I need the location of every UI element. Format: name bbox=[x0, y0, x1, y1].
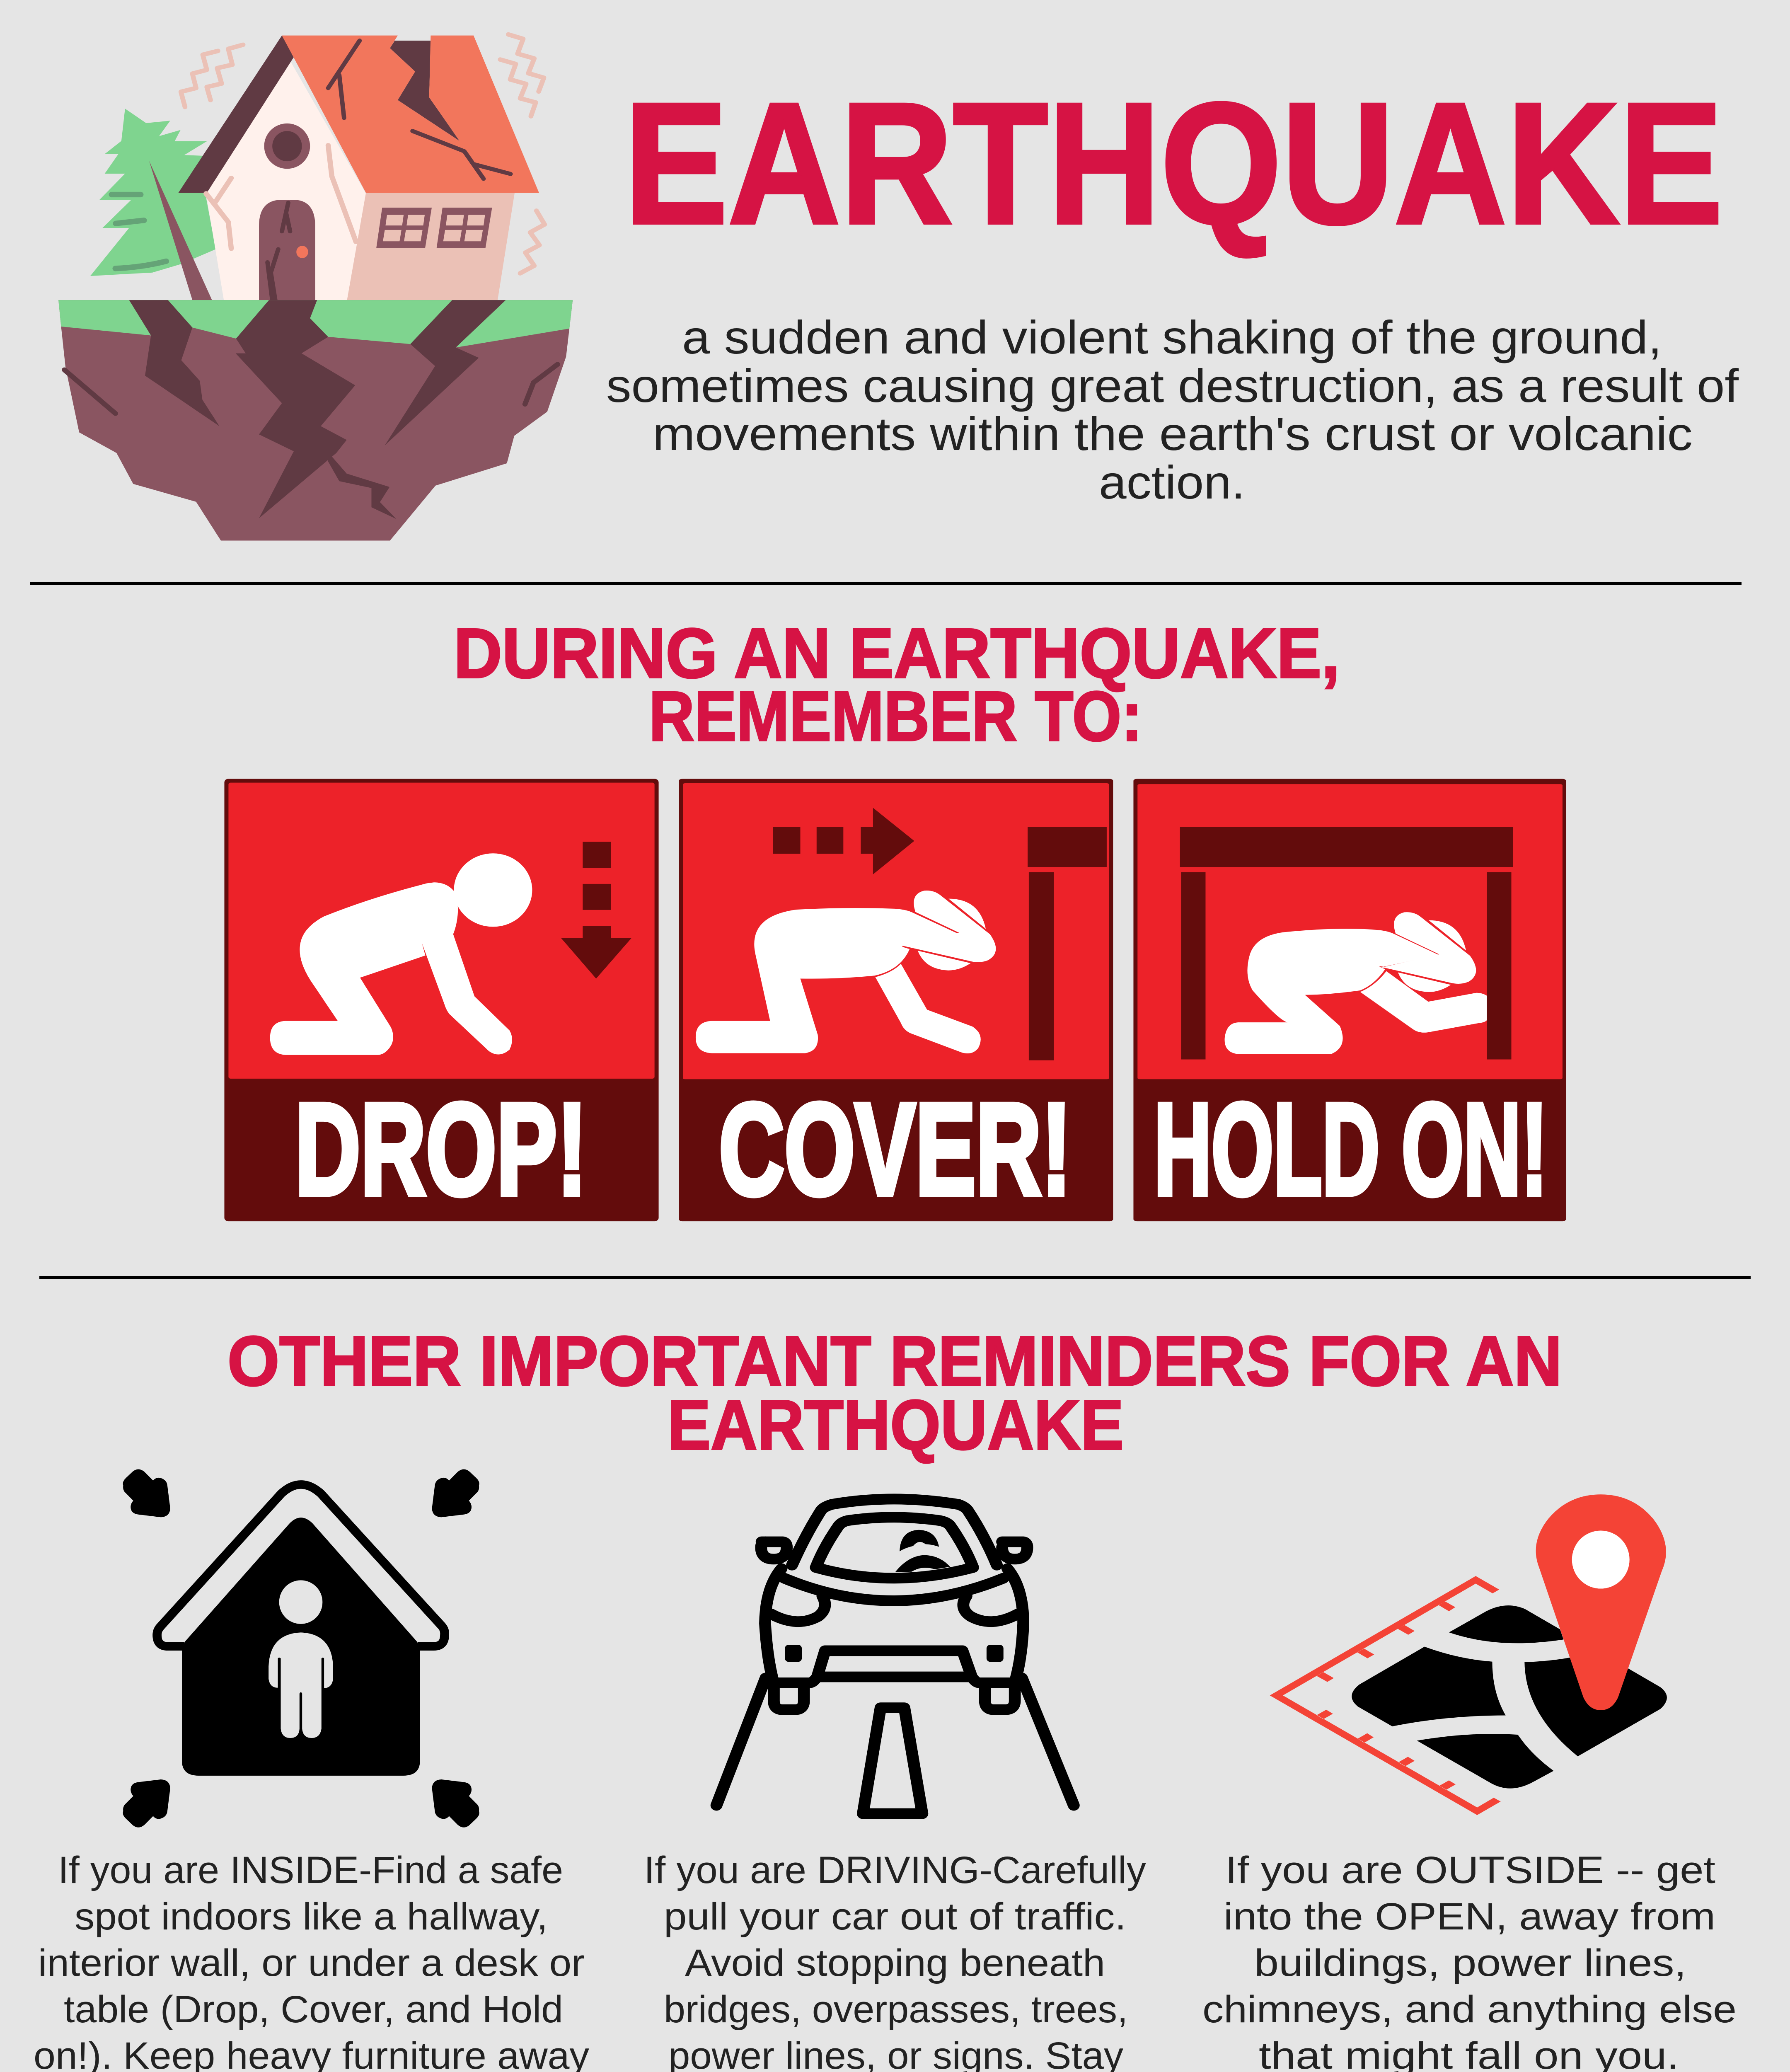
definition text bbox=[606, 311, 1739, 508]
icon: map with location pin bbox=[1270, 1494, 1667, 1815]
tree bbox=[90, 109, 216, 300]
text: if driving: pull your car out of traffic. bbox=[664, 1895, 1126, 1938]
text: if outside: into the OPEN, away from bbox=[1224, 1895, 1715, 1938]
text: if inside: table (Drop, Cover, and Hold bbox=[64, 1988, 563, 2031]
text: if outside bbox=[1202, 1849, 1737, 2072]
text: if inside: interior wall, or under a desk or bbox=[38, 1942, 585, 1984]
table bbox=[1180, 827, 1513, 1059]
text: if driving bbox=[626, 1849, 1164, 2072]
icon: person inside house with inward arrows bbox=[123, 1469, 479, 1828]
text: if driving: bridges, overpasses, trees, bbox=[664, 1988, 1128, 2031]
text: if outside: buildings, power lines, bbox=[1254, 1942, 1686, 1984]
heading: other reminders: OTHER IMPORTANT REMINDERS FOR AN bbox=[227, 1322, 1562, 1401]
table edge bbox=[1028, 827, 1107, 1060]
text: if inside: spot indoors like a hallway, bbox=[75, 1895, 548, 1938]
figure: person covering bbox=[696, 891, 996, 1053]
map pin bbox=[1536, 1494, 1666, 1710]
text: if driving: If you are DRIVING-Carefully bbox=[644, 1849, 1146, 1891]
figure: person holding on bbox=[1225, 912, 1487, 1054]
panel: cover bbox=[679, 779, 1113, 1222]
heading: during an earthquake: REMEMBER TO: bbox=[649, 677, 1142, 756]
heading: other reminders bbox=[227, 1322, 1562, 1464]
text: if inside bbox=[30, 1849, 592, 2072]
definition text: action. bbox=[1099, 456, 1245, 508]
heading: during an earthquake bbox=[454, 614, 1340, 756]
text: if inside: If you are INSIDE-Find a safe bbox=[58, 1849, 563, 1891]
title: EARTHQUAKE bbox=[624, 67, 1723, 259]
arrow: right bbox=[773, 808, 914, 874]
shake marks bbox=[181, 34, 544, 273]
text: if driving: Avoid stopping beneath bbox=[685, 1942, 1105, 1984]
label: cover: COVER! bbox=[719, 1076, 1072, 1222]
label: hold on: HOLD ON! bbox=[1154, 1076, 1548, 1222]
heading: other reminders: EARTHQUAKE bbox=[668, 1386, 1124, 1464]
cracked ground bbox=[58, 300, 573, 541]
text: if outside: If you are OUTSIDE -- get bbox=[1225, 1849, 1715, 1891]
label: drop: DROP! bbox=[295, 1076, 587, 1222]
icon: car on road bbox=[716, 1499, 1074, 1814]
illustration: cracked house on floating ground bbox=[58, 34, 573, 541]
panel: drop bbox=[224, 779, 659, 1222]
panel: hold on bbox=[1133, 779, 1566, 1222]
heading: during an earthquake: DURING AN EARTHQUAKE, bbox=[454, 614, 1340, 693]
definition text: a sudden and violent shaking of the ground, bbox=[682, 311, 1662, 363]
definition text: movements within the earth's crust or volcanic bbox=[653, 408, 1693, 460]
text: if outside: chimneys, and anything else bbox=[1202, 1988, 1737, 2031]
figure: person dropping bbox=[270, 853, 532, 1055]
house bbox=[178, 36, 539, 300]
arrow: down bbox=[561, 842, 631, 978]
definition text: sometimes causing great destruction, as a result of bbox=[606, 360, 1739, 412]
